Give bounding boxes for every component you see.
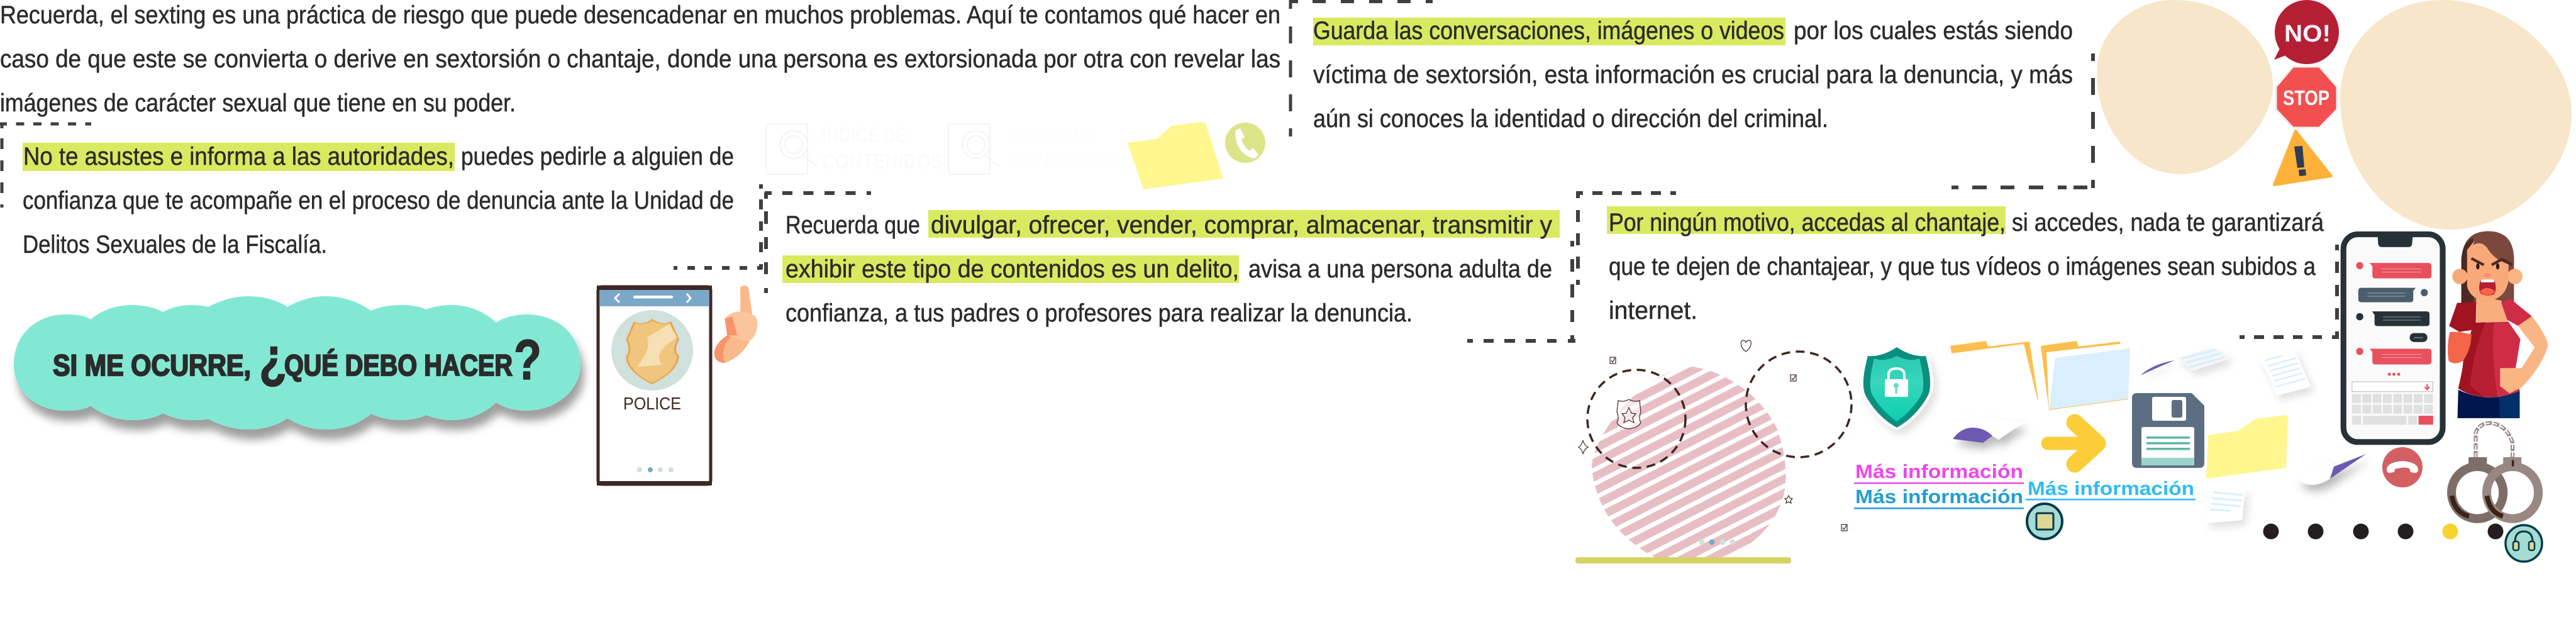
title cloud <box>14 296 580 430</box>
icon: stop sign <box>2276 67 2337 128</box>
icon: hang up button <box>2382 447 2423 487</box>
watermark: index icons <box>766 123 1123 174</box>
icon: police phone: POLICE <box>623 394 681 413</box>
decorative blob: right beige <box>2340 0 2572 230</box>
icon: yellow folder <box>1128 122 1223 189</box>
icon: small paper note <box>2206 490 2245 523</box>
panel: recuerda que: avisa a una persona adulta de <box>1248 255 1552 283</box>
intro text block: Recuerda, el sexting es una práctica de riesgo que puede desencadenar en muchos problemas. Aquí te contamos qué hacer en <box>0 1 1280 29</box>
more info links: Más información <box>1855 486 2023 508</box>
icon: headphones button <box>2506 525 2542 562</box>
watermark: index icons: ÍNDICE DE <box>822 123 907 147</box>
panel: por ningún motivo: si accedes, nada te garantizará <box>2012 209 2324 236</box>
intro text block: imágenes de carácter sexual que tiene en su poder. <box>0 89 516 117</box>
more info links: Más información <box>1855 460 2023 482</box>
icon: security shield <box>1860 345 1933 430</box>
chat bubbles <box>2356 262 2431 364</box>
progress dots <box>2263 523 2503 540</box>
icon: paper sheet <box>2258 348 2311 396</box>
decorative blob: left beige <box>2097 0 2273 174</box>
title text: QUÉ DEBO HACER <box>284 348 513 382</box>
panel: no te asustes: No te asustes e informa a las autoridades, <box>23 143 454 170</box>
icon: curled paper left <box>1953 418 2024 443</box>
illustration: striped blob with police badge <box>1575 340 1852 564</box>
icon: no speech bubble: NO! <box>2284 21 2331 47</box>
intro text block <box>0 1 1280 117</box>
icon: curled paper right <box>2297 454 2366 485</box>
icon: stop sign: STOP <box>2283 86 2329 109</box>
illustration: chat phone <box>2343 235 2443 442</box>
panel: guarda las conversaciones: aún si conoces la identidad o dirección del criminal. <box>1313 105 1828 133</box>
title text: ¿ <box>259 326 287 389</box>
icon: folder with blue sheet <box>2041 341 2130 410</box>
title text <box>53 326 541 392</box>
panel: por ningún motivo: Por ningún motivo, accedas al chantaje, <box>1609 209 2006 236</box>
panel: por ningún motivo: que te dejen de chantajear, y que tus vídeos o imágenes sean subidos a <box>1609 253 2316 280</box>
title text: SI ME OCURRE, <box>53 348 251 382</box>
icon: handcuffs <box>2451 423 2538 519</box>
icon: curled paper top <box>2140 348 2231 375</box>
more info links: Más información <box>2028 477 2194 499</box>
watermark: index icons: ÍNDICE DE <box>1013 123 1097 147</box>
panel: no te asustes <box>0 123 734 258</box>
icon: police phone <box>597 286 712 486</box>
more info links <box>1854 460 2196 509</box>
watermark: index icons: CONTENIDOS <box>822 150 943 174</box>
intro text block: caso de que este se convierta o derive en sextorsión o chantaje, donde una persona es extorsionada por otra con revelar las <box>0 45 1280 73</box>
panel: recuerda que: exhibir este tipo de contenidos es un delito, <box>786 255 1239 283</box>
panel: por ningún motivo <box>1576 191 2338 339</box>
panel: por ningún motivo: internet. <box>1609 297 1697 325</box>
icon: open folder <box>1950 341 2038 411</box>
icon: tablet button <box>2027 504 2062 539</box>
icon: pointing hand <box>714 286 757 363</box>
panel: guarda las conversaciones <box>1289 0 2095 189</box>
panel: recuerda que: confianza, a tus padres o profesores para realizar la denuncia. <box>786 299 1413 327</box>
title text: ? <box>514 329 541 392</box>
watermark: index icons: CONTENIDOS <box>1013 150 1123 174</box>
panel: guarda las conversaciones: por los cuales estás siendo <box>1794 17 2073 45</box>
illustration: angry woman <box>2448 231 2548 418</box>
icon: floppy disk <box>2132 393 2204 468</box>
panel: guarda las conversaciones: Guarda las conversaciones, imágenes o videos <box>1313 17 1784 45</box>
panel: no te asustes: Delitos Sexuales de la Fiscalía. <box>23 231 327 258</box>
icon: phone circle <box>1225 123 1265 163</box>
icon: yellow folder right <box>2206 415 2288 479</box>
panel: recuerda que: Recuerda que <box>786 211 920 239</box>
icon: warning triangle <box>2274 131 2331 185</box>
icon: no speech bubble <box>2274 0 2339 64</box>
panel: recuerda que: divulgar, ofrecer, vender, comprar, almacenar, transmitir y <box>931 211 1552 239</box>
panel: no te asustes: puedes pedirle a alguien de <box>461 143 734 170</box>
arrow <box>2048 423 2097 464</box>
panel: no te asustes: confianza que te acompañe en el proceso de denuncia ante la Unidad de <box>23 187 734 214</box>
panel: guarda las conversaciones: víctima de sextorsión, esta información es crucial para la denuncia, y más <box>1313 61 2073 89</box>
panel: recuerda que <box>674 184 1575 343</box>
keyboard <box>2352 394 2433 425</box>
